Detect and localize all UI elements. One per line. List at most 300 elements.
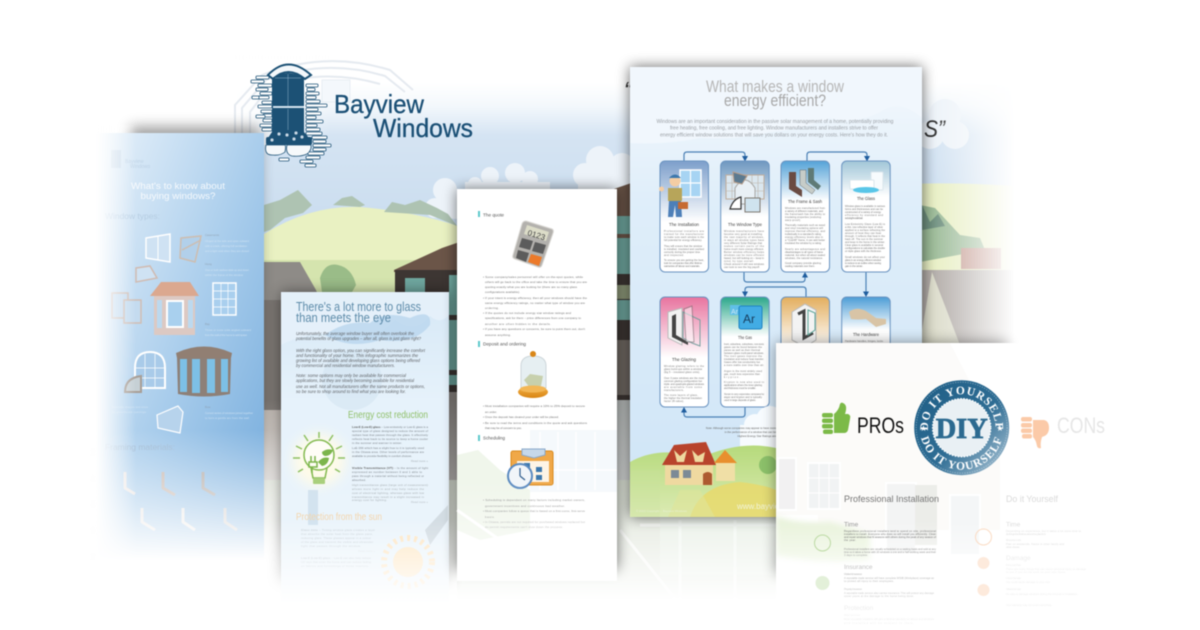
card: the glazing [660,297,708,407]
card: the gas: Inert, odourless, colourless, non-toxic [724,343,765,346]
energy text: transmittance may result in a slight increased in [352,495,424,499]
intro paragraphs: and functionality of your home. This infographic summarizes the [296,353,418,358]
section: deposit and ordering: Deposit and ordering [483,342,527,346]
left house and shrubs [264,262,320,300]
footnote: Note: Although some companies may appear to have more [706,426,776,430]
card: the glazing: (Eg 5 – insulated glass units). [664,371,700,374]
card: the gas: Argon is the most widely used [724,370,763,373]
window descriptions: Specialty shapes and sizes [112,405,149,409]
fade overlays [930,60,1015,355]
heading: than meets the eye [296,311,391,325]
energy text [352,425,429,504]
professional installation text: time so it takes a home with 20 windows a one and a half working week and their [844,550,936,554]
card: the gas: Ar [731,309,739,316]
faint ghost roof [425,505,448,545]
wordmark [334,89,473,143]
card: the window type: become very good at installing [724,233,763,236]
hills and trees [264,207,470,300]
card: the installation: full potential for energy efficiency. [664,239,702,242]
clouds [425,99,969,219]
window type illustrations [112,234,236,433]
card: the gas: krypton. [724,376,740,379]
wordmark: Bayview [334,89,424,119]
window descriptions: within the frame of the window [205,273,244,277]
do it yourself text: There are many things that can cause personal injury or damage [1006,567,1086,571]
deposit bullets: • Be sure to read the terms and conditions in the quote and ask questions [483,421,587,425]
icon: glass dome with money [518,351,548,398]
arch [268,64,311,79]
card: the glass: and keep in the home in the winter. [845,241,885,244]
card: the installation: Professional installers are [664,230,705,233]
card: the frame and sash: sealing materials over them. [785,265,815,268]
footnote [706,426,776,438]
card: the installation: to make sure each window is the [664,236,705,239]
card: the frame and sash: the frame/sash has the ability to [785,213,826,216]
quote bullets: assume anything. [485,333,511,337]
background: house illustration poster: “ [624,77,633,103]
card: the glazing: Over 3 pane windows are the most [664,377,704,380]
quote bullets: another are often hidden in the details. [485,322,551,326]
mini logo [111,150,151,170]
card: the glazing: common glazing configuration but [664,380,702,383]
professional installation text: and repair windows that fit seasons with others during the peak of any season of [844,535,936,539]
badge: do it yourself: DO IT YOURSELF [920,386,1004,431]
card: the window type: mind, by type overall. [724,260,754,263]
partly hidden title text: S” [924,116,946,143]
card: the gas: used in large deposits of glass. [724,399,756,402]
fades [96,125,136,595]
card: the glass: The Glass [857,196,875,201]
window descriptions: Bay [205,322,210,326]
professional installation text: Protection [844,605,874,612]
card: the glass: Small windows do not affect your [845,256,885,259]
illustration: house and meadow [630,442,777,517]
chimney [961,248,1001,269]
card: the glass: Window glass is available in various [845,205,886,208]
footnote: Highest Energy Star Ratings are [737,434,776,438]
intro paragraphs: applications, but they are slowly becoming available for residential [296,378,415,383]
quote bullets: • If your intent is energy efficiency, then all your windows should have the [483,296,587,300]
do it yourself text: to you if you do the work on your own home. [1006,570,1066,574]
card: the frame and sash: Good company provide glazing [785,262,822,265]
card: the window type: can look to see the big payoff. [724,266,760,269]
icon: orange marks [978,557,990,596]
badge: do it yourself: DIY [936,413,988,445]
card: the gas: applications where the inner glazing [724,384,763,387]
window descriptions: Curved series of windows joined together [205,411,253,415]
section heading: framing materials: Framing materials: [105,443,175,452]
professional installation text: 3 days to complete. [844,553,868,557]
energy text: allows more light in and may help reduce the [352,487,424,491]
card: the window type: the vast majority of windows, [724,236,764,239]
do it yourself text: Weekends [1006,538,1022,542]
quote bullets [483,275,587,337]
card: the frame and sash: improve thermal efficiency, and [785,230,826,233]
card: the window type: Better window efficiency helps [724,251,765,254]
icon: calendar and clock [508,449,553,488]
professional installation text: Time [844,522,859,528]
professional installation text: Warranties [844,613,861,617]
energy text: Read more » [411,459,428,463]
card: the gas: The inert gases improve the [724,355,763,358]
professional installation text [844,522,937,625]
ghost window at bottom [457,430,617,560]
card: the window type: home much more energy efficient. [724,248,764,251]
bay window [150,282,199,296]
energy text: special type of glass designed to reduce the amount of [352,429,428,433]
card: the gas: Gases offer low conductivity but [724,361,760,364]
card: the frame and sash: insulated the window by a rating [785,242,822,245]
card: the installation: and inspected. [664,254,684,257]
do it yourself text: Damage [1006,555,1031,562]
card: the glass: glass in an energy efficient window [845,259,881,262]
card: the glass: or triple glass with the thickness [845,250,882,253]
website and copyright: © 2013 Copyright – Bayview Windows [636,509,687,513]
section: scheduling [478,435,505,441]
footnote cloud [740,406,784,450]
professional installation text: Professional installers are usually scheduled on a waiting basis and sold at any [844,547,937,551]
panel title: buying windows? [140,191,216,201]
professional installation text: A reputable trade service also carries insurance. This will protect any damage [844,591,934,595]
intro paragraphs: so be sure to shop around to find what you are looking for. [296,389,406,394]
card: the frame and sash: windows, the natural resistance. [785,257,823,260]
sun text: Glass tints – Tinting window glass creates a layer [301,528,375,532]
panel: there's a lot more to glass [264,292,457,630]
description: free heating, free cooling, and free lighting. Window manufacturers and installers strive to offer [670,126,878,132]
card: the installation: To ensure you are getting the best, [664,259,704,262]
card: the glass: Low Emissivity Glass (Low-E) is [845,223,886,226]
column heading: professional installation: Professional Installation [844,494,939,504]
card: the gas: gas, much less expensive than [724,373,761,376]
bow window [176,346,232,358]
professional installation text: cover yours at the damage to the home being done. [844,594,914,598]
quote bullets: ordering. [485,306,499,310]
quote bullets: • Some company/sales personnel will offer on-the-spot quotes, while [483,275,583,279]
card: the glazing: glass build-ups within a window [664,368,702,371]
title [706,78,844,110]
card: the window type: based, but still looking on – keep in [724,257,765,260]
card: the glazing: the higher the thermal insulation [664,397,703,400]
quote bullets: quoting exactly what you are looking for (there are so many glass [485,285,577,289]
card: the frame and sash: material, but when all about sealed [785,254,826,257]
intro paragraphs: growing list of available and developing glass options being offered [296,358,420,363]
energy text: reflects heat back to its source to keep a home cooler [352,437,428,441]
mini logo: Bayview [125,159,144,165]
do it yourself text: Depending on experience, but it takes a lot more time to [1006,529,1082,533]
card: the glass: gain in the winter. [845,265,863,268]
description: Windows are an important consideration in the passive solar management of a home, potentially providing [656,119,894,125]
arch window [135,352,165,388]
ghost house photo [776,459,978,562]
sun text: that absorbs the solar heat from the glass pane, [301,532,373,536]
window descriptions: Bow [205,405,211,409]
card: the glazing: The more layers of glass, [664,394,698,397]
flow arrows [681,152,870,417]
scheduling bullets: • In Ottawa, permits are not required for purchased windows replaced but [483,520,585,524]
sun text: light that passes through the window. [301,544,361,548]
heading: There's a lot more to glass [296,300,421,314]
ground under panels [264,480,784,630]
website and copyright [636,502,785,513]
quote bullets: specifications, ask for them – price differences from one company to [485,316,581,320]
panel: What's to know about buying windows [80,125,290,610]
card: the glass: back off. The sun in the summer [845,238,883,241]
energy text: in the Ottawa area. Other levels of performance are [352,450,424,454]
card: the glazing: Window glazing refers to the [664,365,705,368]
card: the frame and sash: Windows are manufactured from [785,207,825,210]
intro paragraphs: potential benefits of glass upgrades – after all, glass is just glass right? [295,336,421,341]
right roof [922,270,1015,345]
scheduling bullets: • Most companies follow a queue that is based on a first-come, first-serve [483,509,585,513]
heading [296,300,421,325]
energy text: Low-E (Low-E) glass – Low-emissivity or Low-E glass is a [352,425,428,429]
window descriptions: Hung [205,262,212,266]
scheduling bullets: government incentives and continuous bad weather. [485,504,565,508]
card: the glazing: are available from some [664,386,703,389]
card: the glass: a thin, low reflective layer of silver [845,226,883,229]
window [272,73,304,132]
energy text: Read more » [411,500,428,504]
card: the frame and sash: warp-proof). [785,219,801,222]
intro paragraphs: use as well. Not all manufacturers offer the same products or options, [296,384,425,389]
badge: do it yourself: ★ [996,424,1004,433]
card: the gas: insulation and reduce heat transfer. [724,358,764,361]
card: the frame and sash [781,161,830,272]
scheduling bullets: basis. [485,515,495,519]
window descriptions: Casements [205,233,220,237]
icon: clock green [814,535,830,551]
installer illustration [659,170,701,217]
card: the glass: to reduce to an outline when seeing [845,262,882,265]
professional installation text: Most reputable installers will give a lifetime warranty on labour and windows [844,617,935,621]
card: the installation: warranties off labour and materials. [664,265,700,268]
energy text: in the summer and warmer in winter. [352,441,402,445]
card: the gas: gases can be found between the [724,346,763,349]
section: scheduling: Scheduling [483,436,505,440]
window descriptions: and a tight seal when they are closed [205,249,249,253]
red roof house [665,461,713,485]
icon: calculator [513,221,553,267]
professional installation text: installers to install. Everyone who does so will install you efficiently. Clean [844,532,936,536]
energy text: High transmittance glass (large unit of measurement) [352,483,428,487]
card: the installation: correctly during the proper time [664,251,701,254]
section: the quote [478,211,505,218]
card: the glazing: The Glazing [672,357,697,362]
professional installation text: the year. [844,538,856,542]
card: the frame and sash: insulating properties (enduring [785,216,822,219]
card: the installation: trained for the manufacturer [664,233,704,236]
quote bullets: configurations available). [485,290,520,294]
card: the gas: The Gas [738,335,752,340]
energy text: LoE-366 which has a slight hue to it is typically used [352,446,424,450]
energy text: Visible Transmittance (VT) – Is the amount of light [352,466,428,470]
card: the glazing: triple- and quadruple-glazed windows [664,383,705,386]
energy text: cost of electrical lighting, whereas glass with low [352,491,425,495]
badge: do it yourself: DO IT YOURSELF [920,435,1002,471]
do it yourself text: Window Damage [1006,587,1022,591]
do it yourself text: Your warranty may not cover everything. [1006,603,1052,607]
deposit bullets: • Once the deposit has cleared your order will be placed. [483,415,559,419]
professional installation text: Property Insurance [844,587,862,591]
energy text: available to provide flexibility in comfort choices. [352,454,412,458]
card: the glass: configurations to calculate the double [845,247,886,250]
card: the window type: Check around if still new windows [724,263,765,266]
window descriptions: Hinged at the side and open outward [205,239,249,243]
energy text: energy cost for lighting. [352,498,387,502]
logo: Bayview Windows [251,64,473,167]
icon: sun [384,538,432,586]
icon: thumbs down [1021,417,1049,448]
badge: do it yourself [913,380,1010,476]
card: the frame and sash: Thermally materials such as wood [785,224,826,227]
card: the window type: Window manufacturers have [724,230,765,233]
card: the hardware [842,297,890,407]
scheduling bullets: do permit requirements can't slow down the process. [485,525,563,529]
bricks [251,76,331,167]
card: the frame and sash: a "CLEAR" frame, it can add better [785,239,825,242]
card: the frame and sash: and vinyl insulating options will [785,227,823,230]
do it yourself text: Personal Risk [1006,563,1022,567]
intro paragraphs: Note: some options may only be available for commercial [296,373,407,378]
energy text: pass through a material without being reflected or [352,474,424,478]
do it yourself text: It's easy to damage windows during the removal or installation. [1006,592,1078,596]
card: the gas: Ar [743,312,755,326]
sun text: Read more » [358,549,375,553]
badge: do it yourself: ★ [920,424,927,433]
panel: quote, deposit and scheduling guide [457,189,617,581]
window descriptions: from the wall of the home to add space [205,333,247,337]
background: house illustration poster [235,55,1074,630]
panel title: What's to know about [131,181,226,191]
card: the gas: Krypton is now also used in [724,381,765,384]
sun text: of the glass and transmit the visible and ultraviolet [301,540,373,544]
title: What makes a window [706,78,844,96]
energy text: radiant heat that passes through the glass. It effectively [352,433,429,437]
card: the glass: efficiency by standard and [845,214,884,217]
professional installation text: to protect all injury to their employees. [844,579,894,583]
do it yourself text: do things the first time around so plan for it. [1006,532,1046,536]
window descriptions: for greenhouse openings [112,410,147,414]
card: the spacer [781,297,830,407]
description: energy efficient window solutions that will save you dollars on your energy costs. Here's how they do it. [660,132,888,138]
sun text: Low-E (Low-E) glass – Low-E can also help reduce [301,556,371,560]
main house with dark windows [394,180,640,272]
card: the glass [842,161,890,272]
ghost arched window behind logo [235,61,413,135]
greenhouse window [157,406,183,433]
title: energy efficient? [724,92,826,110]
scheduling bullets [483,498,585,529]
do it yourself text: Home Damage [1006,576,1022,580]
sun text: reducing glare. These glasses appear in a colour [301,536,371,540]
mini logo: Windows [130,164,151,170]
deposit bullets: • Most installation companies will require a 10% to 25% deposit to secure [483,404,585,408]
quote bullets: • If the quotes do not include energy star window ratings and [483,311,571,315]
card: the hardware: The Hardware [853,332,880,337]
window descriptions: One or both sashes slide up and down [205,268,249,272]
intro paragraphs [295,331,426,394]
quote bullets: same energy efficiency ratings, no matter what type of window you are [485,301,585,305]
intro paragraphs: by commercial and residential window manufacturers. [296,363,395,368]
section heading: window types: Window types: [105,211,160,221]
card: the glass: reducing the solar load. [845,217,863,220]
card: the frame and sash: Nearly are advantageous and [785,248,826,251]
card: the gas: Xenon is very expensive compared to [724,393,765,396]
card: the gas: panes as well as their thermal [724,349,760,352]
icon: thumbs up [822,403,850,434]
card: the installation: is installed, insulated and caulked [664,248,705,251]
card: the gas: and thickness must be smaller. [724,387,756,390]
card: the installation: look for companies that offer lifetime [664,262,703,265]
sun text: UV rays that enter the home and can reduce fading [301,560,371,564]
window descriptions: with a crank, offering full ventilation [205,244,247,248]
sun text [301,528,375,568]
card: the frame and sash: a variety of different materials, and [785,210,824,213]
professional installation text: and installed will be subject to them. [844,621,914,625]
professional installation text: Insurance [844,564,873,571]
sun text: on fabrics and furnishings of home interiors. [301,564,369,568]
card: the window type [721,161,769,272]
framing material illustrations [125,472,237,530]
panel title [131,181,226,201]
heading: protection from the sun: Protection from the sun [296,512,382,523]
label: CONs: CONs [1057,413,1105,438]
icon: clock orange [976,529,992,545]
card: the glass: Clear glass is available in several [845,244,883,247]
card: the installation: The Installation [669,222,700,227]
card: the hardware: Hardware handles, hinges, locks [845,340,884,343]
window descriptions [112,233,253,420]
card: the installation: They will ensure that the window [664,245,702,248]
energy text: absorbed. [352,478,366,482]
card: the frame and sash: disadvantages to all types of frame [785,251,824,254]
professional installation text: A reputable trade service will have complete WSIB (Workplace) coverage as [844,576,935,580]
card: the installation [659,161,708,272]
do it yourself text [1006,522,1086,607]
card: the window type: makes certain parts of the [724,245,765,248]
card: the gas: between glass multi-panel windows. [724,352,764,355]
panel: PROs and CONs of DIY [766,334,1105,625]
wordmark: Windows [373,113,473,143]
window descriptions: to form a gentle arc from the wall [205,416,249,420]
intro paragraphs: With the right glass option, you can significantly increase the comfort [296,348,426,353]
card: the frame and sash: The Frame & Sash [788,199,823,204]
heading: energy cost reduction: Energy cost reduction [348,410,428,421]
footnote: in the performance of a window that can be [725,430,776,434]
deposit bullets: an order. [485,410,497,414]
card: the window type: The Window Type [728,222,763,227]
card: the glass: constructed of a variety of energy [845,211,882,214]
card: the window type: windows can be more efficient [724,254,764,257]
professional installation text: Worker's Insurance [844,572,862,576]
quote bullets: others will go back to the office and take the time to ensure that you are [485,280,587,284]
window descriptions: Three or more units angled outward [205,328,251,332]
scheduling bullets: • Scheduling is dependent on many factors including market owners, [483,498,585,502]
deposit bullets: that may be of concern to you. [485,426,522,430]
small orange house [716,462,735,481]
panel: what makes a window energy efficient [630,67,922,517]
card: the window type: very different Solar Ratings that [724,242,762,245]
do it yourself text: Time [1006,522,1021,528]
do it yourself text: Plan on weekends. Factor in other family and [1006,542,1064,546]
card: the glazing: manufacturers. [664,389,684,392]
section: the quote: The quote [483,212,505,218]
card: the glass: applied to a surface reflecting the [845,229,886,232]
description [656,119,894,138]
icon: light bulb [293,432,345,486]
card: the gas [721,297,769,407]
icon: calculator: 0123 [526,228,547,242]
